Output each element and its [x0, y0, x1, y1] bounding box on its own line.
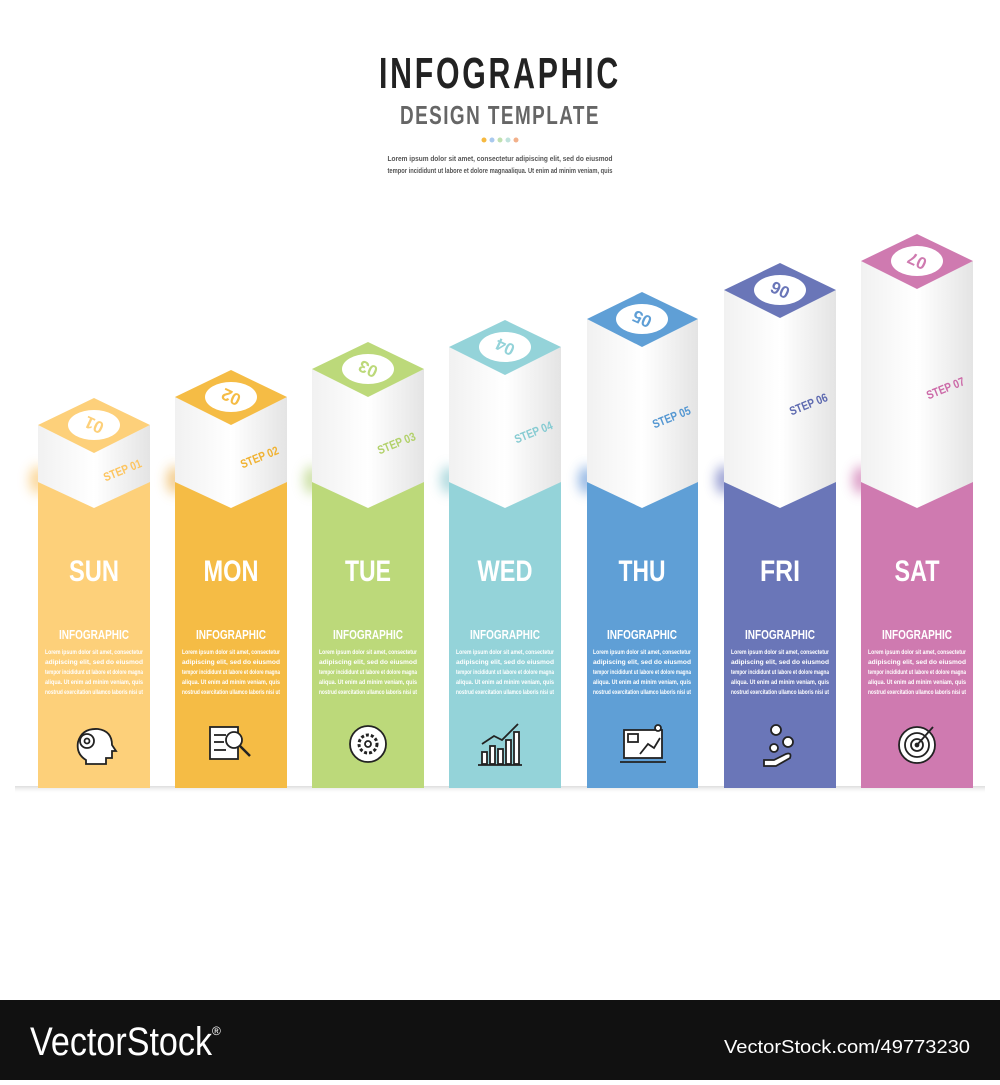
column FRI: aliqua. Ut enim ad minim veniam, quis	[731, 680, 830, 686]
column TUE: 03	[356, 356, 381, 381]
column THU: adipiscing elit, sed do eiusmod	[593, 660, 691, 666]
column TUE: INFOGRAPHIC	[333, 627, 403, 642]
floor shadow	[15, 786, 985, 794]
column TUE: Lorem ipsum dolor sit amet, consectetur	[319, 650, 418, 656]
column WED: INFOGRAPHIC	[470, 627, 540, 642]
intro text	[388, 154, 613, 175]
column THU: THU	[618, 555, 666, 588]
footer bar	[0, 1000, 1000, 1080]
title	[379, 49, 621, 130]
column FRI: Lorem ipsum dolor sit amet, consectetur	[731, 650, 830, 656]
icon: laptop presentation	[620, 725, 666, 762]
column FRI: tempor incididunt ut labore et dolore magna	[731, 670, 830, 676]
column THU: aliqua. Ut enim ad minim veniam, quis	[593, 680, 692, 686]
column THU: 05	[630, 306, 655, 331]
column WED: aliqua. Ut enim ad minim veniam, quis	[456, 680, 555, 686]
icon: target	[899, 727, 935, 763]
column MON: tempor incididunt ut labore et dolore magna	[182, 670, 281, 676]
column FRI	[724, 263, 836, 788]
column WED: Lorem ipsum dolor sit amet, consectetur	[456, 650, 555, 656]
column SUN	[38, 398, 150, 788]
column MON: aliqua. Ut enim ad minim veniam, quis	[182, 680, 281, 686]
icon: hand coins	[764, 725, 793, 766]
column SAT: Lorem ipsum dolor sit amet, consectetur	[868, 650, 967, 656]
column SAT: tempor incididunt ut labore et dolore magna	[868, 670, 967, 676]
column WED: 04	[492, 334, 518, 359]
column SAT: INFOGRAPHIC	[882, 627, 952, 642]
column SUN: tempor incididunt ut labore et dolore magna	[45, 670, 144, 676]
column SAT: 07	[905, 248, 930, 273]
column SAT	[861, 234, 973, 788]
column SAT: adipiscing elit, sed do eiusmod	[868, 660, 966, 666]
column MON: MON	[204, 555, 258, 588]
column THU: tempor incididunt ut labore et dolore magna	[593, 670, 692, 676]
column MON: STEP 02	[238, 443, 281, 471]
column SUN: aliqua. Ut enim ad minim veniam, quis	[45, 680, 144, 686]
column WED: WED	[478, 555, 532, 588]
intro text: Lorem ipsum dolor sit amet, consectetur adipiscing elit, sed do eiusmod	[388, 154, 613, 163]
column THU: Lorem ipsum dolor sit amet, consectetur	[593, 650, 692, 656]
icon: document search	[210, 727, 250, 759]
column TUE: adipiscing elit, sed do eiusmod	[319, 660, 417, 666]
dots	[482, 138, 518, 142]
column WED: tempor incididunt ut labore et dolore magna	[456, 670, 555, 676]
column THU: STEP 05	[650, 403, 693, 431]
column SAT: aliqua. Ut enim ad minim veniam, quis	[868, 680, 967, 686]
column SAT: SAT	[894, 555, 940, 588]
column THU: nostrud exercitation ullamco laboris nisi ut	[593, 690, 691, 696]
icon: bar chart	[478, 724, 522, 765]
intro text: tempor incididunt ut labore et dolore magnaaliqua. Ut enim ad minim veniam, quis	[388, 166, 612, 175]
column WED: nostrud exercitation ullamco laboris nisi ut	[456, 690, 554, 696]
column MON: 02	[219, 384, 244, 409]
glow shadows	[30, 466, 869, 494]
column MON: nostrud exercitation ullamco laboris nisi ut	[182, 690, 280, 696]
column TUE	[312, 342, 424, 788]
column TUE: aliqua. Ut enim ad minim veniam, quis	[319, 680, 418, 686]
column FRI: 06	[768, 277, 793, 302]
column THU	[587, 292, 698, 788]
column MON: INFOGRAPHIC	[196, 627, 266, 642]
column WED	[449, 320, 561, 788]
column SUN: 01	[82, 412, 107, 437]
footer bar: VectorStock.com/49773230	[724, 1037, 970, 1057]
column SUN: nostrud exercitation ullamco laboris nisi ut	[45, 690, 143, 696]
column WED: adipiscing elit, sed do eiusmod	[456, 660, 554, 666]
column WED: STEP 04	[512, 418, 555, 446]
column MON: adipiscing elit, sed do eiusmod	[182, 660, 280, 666]
column TUE: nostrud exercitation ullamco laboris nisi ut	[319, 690, 417, 696]
column SUN: adipiscing elit, sed do eiusmod	[45, 660, 143, 666]
column SAT: STEP 07	[924, 374, 967, 402]
column FRI: adipiscing elit, sed do eiusmod	[731, 660, 829, 666]
footer bar: VectorStock	[30, 1020, 213, 1064]
icon: head lightbulb	[78, 729, 116, 764]
column SUN: Lorem ipsum dolor sit amet, consectetur	[45, 650, 144, 656]
column FRI: STEP 06	[787, 390, 830, 418]
column MON: Lorem ipsum dolor sit amet, consectetur	[182, 650, 281, 656]
column SUN: STEP 01	[101, 456, 144, 484]
column TUE: TUE	[345, 555, 391, 588]
column TUE: tempor incididunt ut labore et dolore magna	[319, 670, 418, 676]
column MON	[175, 370, 287, 788]
column SAT: nostrud exercitation ullamco laboris nisi ut	[868, 690, 966, 696]
icon: gear cycle	[350, 726, 386, 762]
footer bar: ®	[212, 1024, 221, 1038]
column FRI: INFOGRAPHIC	[745, 627, 815, 642]
column SUN: INFOGRAPHIC	[59, 627, 129, 642]
column SUN: SUN	[69, 555, 119, 588]
title: INFOGRAPHIC	[379, 49, 621, 98]
column THU: INFOGRAPHIC	[607, 627, 677, 642]
subtitle: DESIGN TEMPLATE	[400, 100, 600, 130]
column FRI: nostrud exercitation ullamco laboris nisi ut	[731, 690, 829, 696]
column TUE: STEP 03	[375, 429, 418, 457]
column FRI: FRI	[760, 555, 800, 588]
